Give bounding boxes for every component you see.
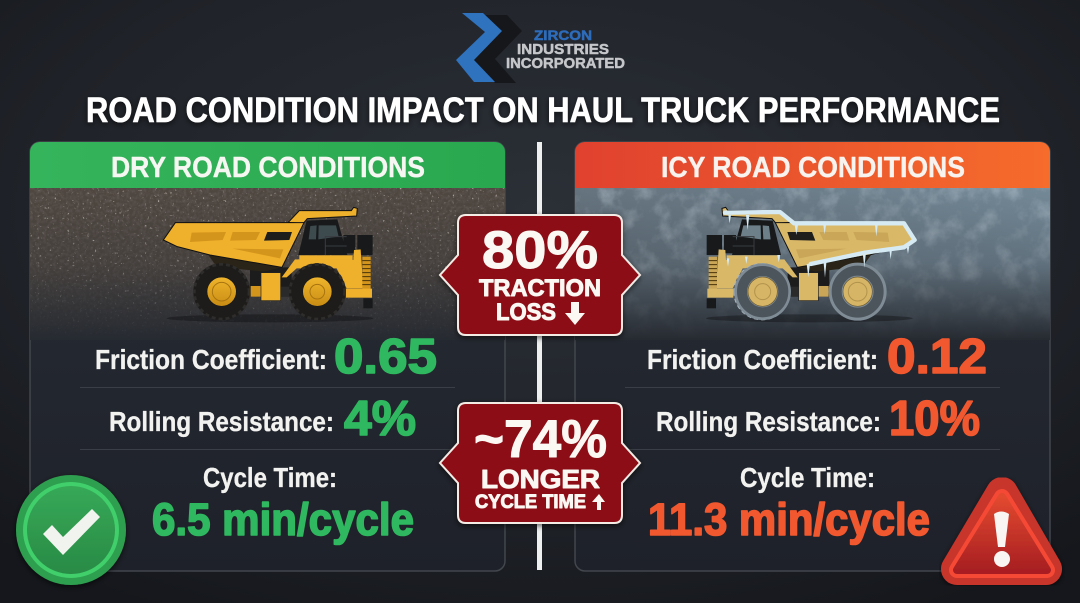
callout: 74% longer cycle time: ~74%	[474, 410, 607, 469]
callout: 74% longer cycle time: LONGER	[481, 464, 600, 494]
callout: 80% traction loss: 80%	[482, 221, 598, 280]
heading: icy road conditions: ICY ROAD CONDITIONS	[661, 152, 965, 184]
icon: frozen haul truck	[706, 207, 916, 322]
metric: rolling icy: Rolling Resistance:	[656, 406, 881, 437]
icon: down arrow	[565, 302, 585, 325]
metric: cycle icy: Cycle Time:	[740, 462, 875, 493]
callout: 80% traction loss: LOSS	[496, 299, 556, 326]
metric: friction icy: 0.12	[887, 330, 987, 384]
panel: icy road conditions	[575, 142, 1050, 571]
heading: dry road conditions: DRY ROAD CONDITIONS	[111, 152, 425, 184]
metric: rolling dry	[109, 392, 416, 446]
logo: ZIRCON	[534, 28, 592, 43]
icon: green check badge	[16, 475, 126, 585]
metric: cycle icy: 11.3 min/cycle	[648, 494, 930, 545]
centre divider line	[537, 142, 542, 570]
callout: 74% longer cycle time	[440, 403, 640, 523]
metric: rolling dry: Rolling Resistance:	[109, 406, 334, 437]
icon: yellow haul truck	[163, 207, 373, 322]
metric: rolling icy	[656, 392, 980, 446]
metric: friction dry	[95, 330, 437, 384]
callout: 74% longer cycle time: CYCLE TIME	[475, 492, 586, 513]
logo: INDUSTRIES	[517, 42, 609, 58]
icon: red warning triangle	[957, 493, 1047, 570]
metric: friction icy: Friction Coefficient:	[647, 344, 878, 375]
panel: dry road conditions	[30, 142, 505, 571]
icon: up arrow	[592, 494, 605, 510]
metric: rolling icy: 10%	[889, 392, 980, 446]
metric: friction dry: Friction Coefficient:	[95, 344, 327, 375]
logo	[456, 13, 625, 83]
callout: 80% traction loss	[440, 215, 640, 335]
metric: rolling dry: 4%	[344, 392, 416, 446]
metric: cycle dry: 6.5 min/cycle	[152, 494, 414, 545]
metric: cycle dry: Cycle Time:	[203, 462, 337, 493]
callout: 80% traction loss: TRACTION	[479, 275, 601, 302]
metric: friction dry: 0.65	[334, 330, 437, 384]
logo: INCORPORATED	[506, 56, 625, 72]
metric: cycle icy	[648, 462, 930, 545]
header: dry	[30, 142, 505, 188]
metric: friction icy	[647, 330, 987, 384]
header: icy	[575, 142, 1050, 188]
metric: cycle dry	[152, 462, 414, 545]
